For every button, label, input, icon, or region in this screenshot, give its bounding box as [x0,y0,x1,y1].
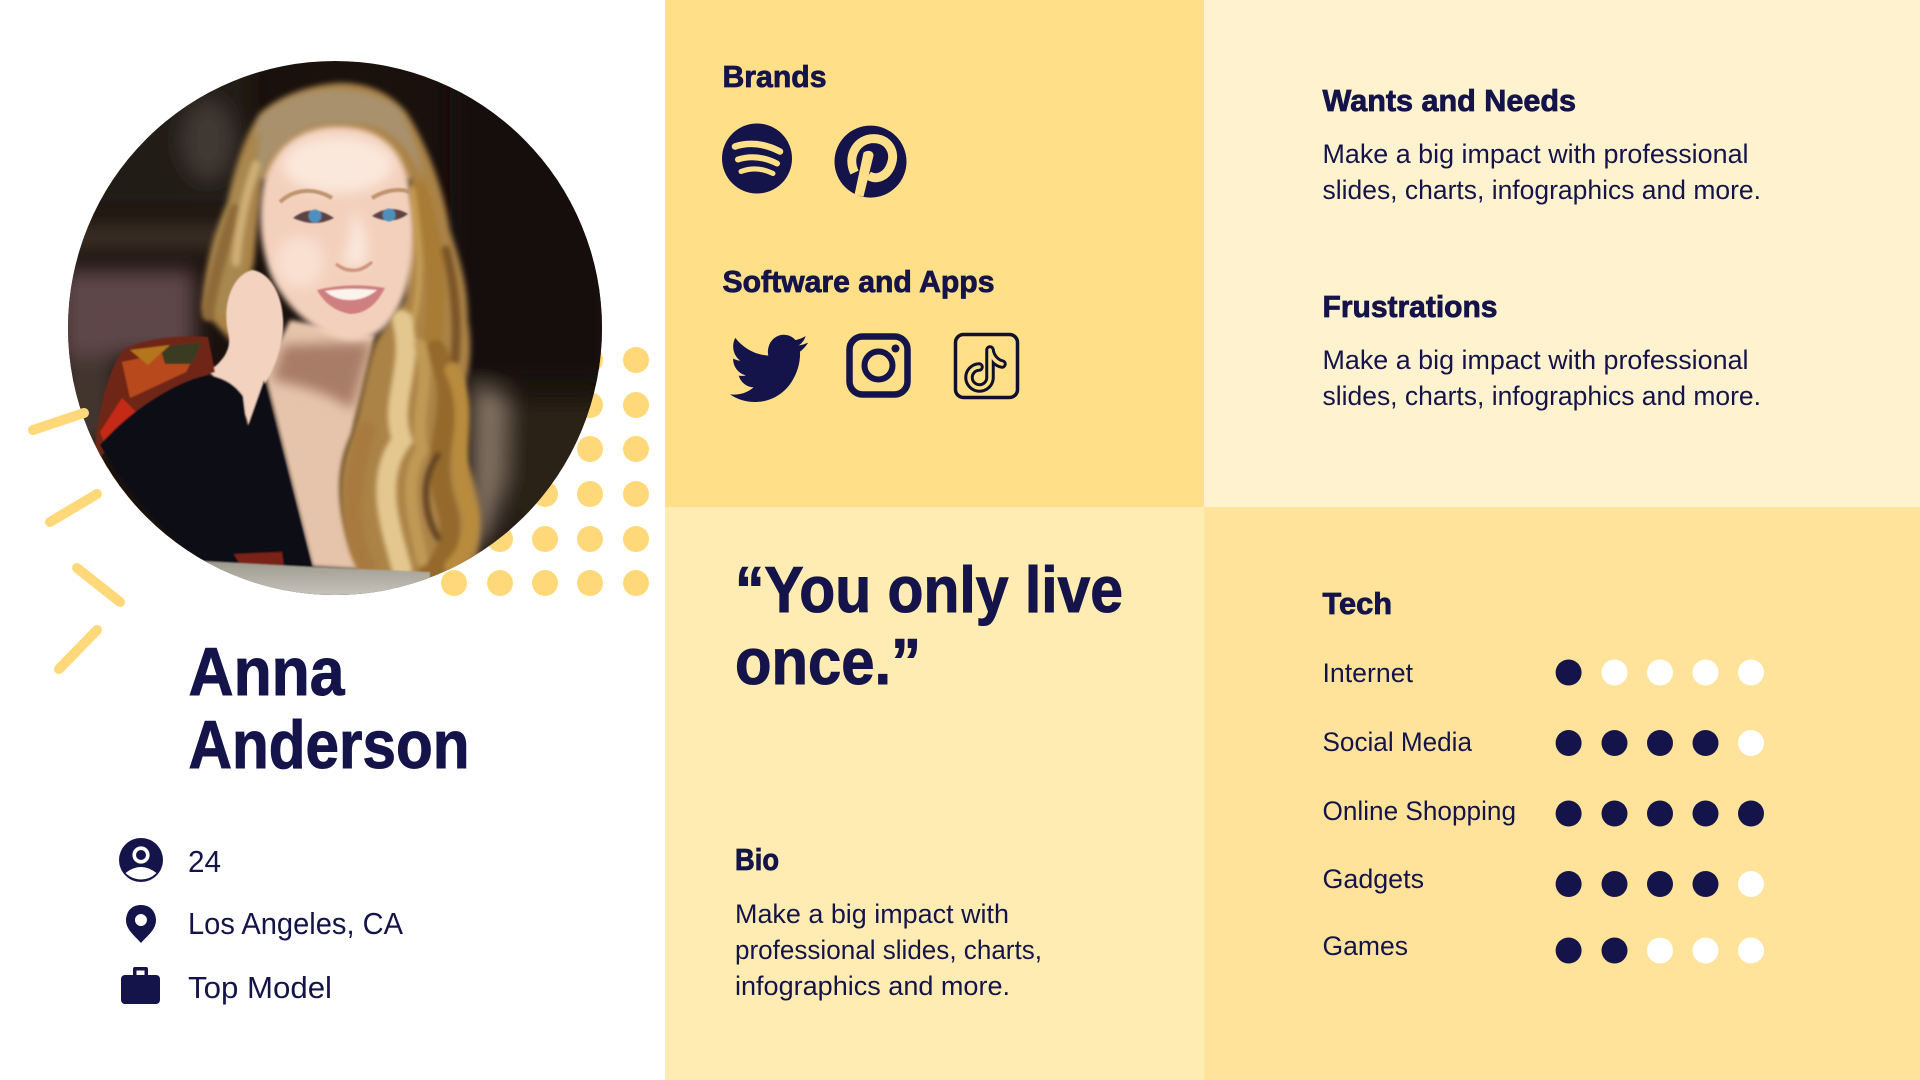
name heading [188,634,470,783]
text block: wants and needs [1322,83,1761,205]
panel: quote and bio [665,507,1204,1080]
icon: location pin [126,905,156,943]
black sleeve and dress [100,375,312,567]
row: internet [1322,658,1764,688]
text block: frustrations: Make a big impact with professional [1322,345,1748,375]
row: gadgets: Gadgets [1322,864,1424,894]
icon: briefcase [121,967,160,1004]
left hair strands [208,210,235,315]
crown tone [254,89,424,185]
text: age: 24 [188,844,221,879]
nose shadow [336,262,372,271]
chest skin [264,320,375,570]
back hair [202,83,481,585]
decorative dot grid [441,347,649,596]
portrait photo [60,55,610,610]
panel: profile background [0,0,665,1080]
heading: brands: Brands [722,59,826,94]
panel: tech ratings [1204,507,1920,1080]
neck shadow [272,342,372,410]
row: games [1322,931,1764,964]
row: games: Games [1322,931,1408,961]
icon: spotify [722,124,792,194]
heading: software and apps: Software and Apps [722,264,994,299]
heading: tech: Tech [1322,586,1392,621]
quote: once.” [735,625,921,698]
text block: bio: infographics and more. [735,971,1010,1001]
text block: bio: professional slides, charts, [735,935,1042,965]
text block: frustrations: Frustrations [1322,289,1498,324]
panel: brands and software [665,0,1204,507]
text: location: Los Angeles, CA [188,906,403,941]
face highlights [283,137,393,193]
face [260,127,414,340]
icon: twitter [730,335,808,402]
tech ratings chart [1322,586,1764,964]
row: social media: Social Media [1322,727,1473,757]
text block: bio: Make a big impact with [735,899,1009,929]
text block: wants and needs: slides, charts, infographics and more. [1322,175,1761,205]
text block: frustrations: slides, charts, infographics and more. [1322,381,1761,411]
text block: bio: Bio [735,842,779,877]
table [202,560,431,595]
brows [280,191,332,202]
right hair strands [418,190,436,345]
icon: pinterest [834,126,906,198]
lips [317,285,385,314]
name heading: Anderson [188,707,470,783]
hand and wrist [208,270,283,425]
name heading: Anna [188,634,346,710]
text block: bio [735,842,1042,1001]
icon: instagram [850,336,908,394]
text block: wants and needs: Make a big impact with professional [1322,139,1748,169]
red shoulder pattern [95,336,215,458]
eyes [293,210,334,223]
text: occupation: Top Model [188,970,332,1005]
row: online shopping: Online Shopping [1322,796,1516,826]
panel: wants and frustrations [1204,0,1920,507]
text block: frustrations [1322,289,1761,411]
decorative sunburst dashes [33,413,120,669]
icon: tiktok [956,334,1018,398]
quote [735,553,1123,698]
row: internet: Internet [1322,658,1413,688]
row: social media [1322,727,1764,757]
icon: person [119,838,163,882]
row: gadgets [1322,864,1764,897]
row: online shopping [1322,796,1764,826]
quote: “You only live [735,553,1123,626]
text block: wants and needs: Wants and Needs [1322,83,1576,118]
